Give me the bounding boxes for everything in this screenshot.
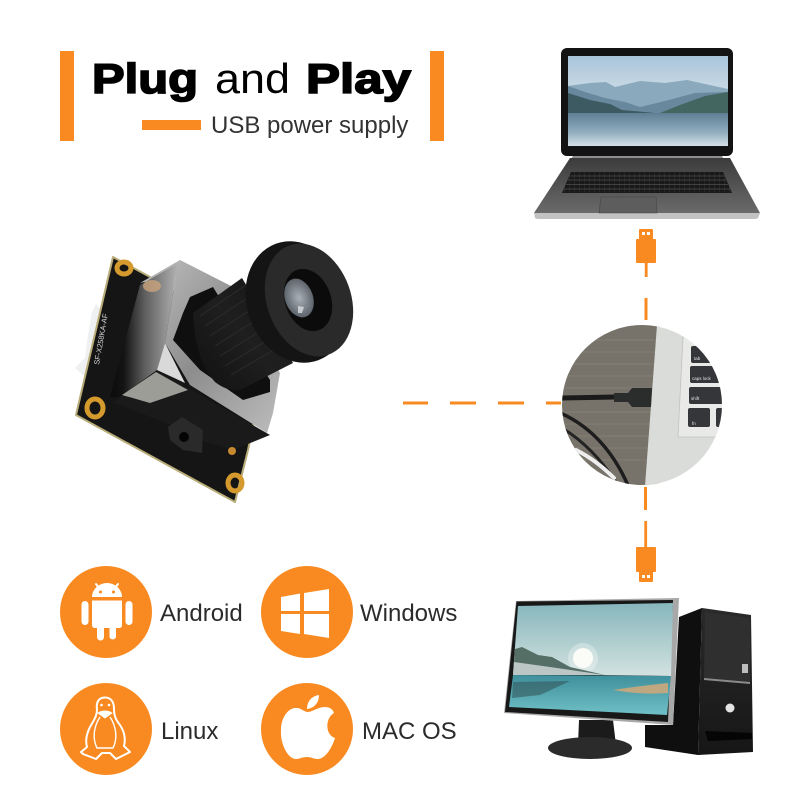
desktop computer: [504, 598, 753, 759]
panel: Linux: [60, 683, 218, 775]
circle: [261, 683, 353, 775]
laptop front lip: [534, 213, 760, 219]
icon: linux penguin: [81, 698, 130, 759]
monitor stand neck: [578, 720, 616, 745]
monitor screen: [509, 603, 673, 715]
right orange bar: [430, 51, 444, 141]
tower power button: [726, 704, 734, 712]
camera module: [75, 227, 368, 502]
laptop touchpad: [599, 197, 657, 213]
metal fold highlight: [157, 343, 185, 383]
laptop screen: [568, 56, 728, 146]
title: Plug: [92, 55, 198, 102]
tower lower slot: [705, 731, 752, 741]
key plate: [678, 337, 724, 437]
white connector behind board: [75, 304, 102, 376]
label: MAC OS: [362, 718, 457, 745]
USB connector: [614, 388, 652, 407]
tower front: [698, 608, 753, 755]
circuit board: [76, 257, 270, 502]
barrel threads: [200, 285, 282, 375]
mounting holes: [87, 262, 242, 491]
metal front highlight: [122, 372, 188, 403]
panel: Android: [60, 566, 243, 658]
dashed connector: vertical upper: [644, 298, 648, 320]
icon: android: [82, 583, 132, 640]
laptop: [534, 48, 760, 219]
label: Windows: [360, 600, 457, 627]
coiled cables: [562, 412, 630, 484]
monitor frame: [504, 598, 679, 725]
key labels: shift: [691, 396, 700, 401]
icon: USB plug bottom: [636, 521, 656, 582]
circle: [60, 683, 152, 775]
key labels: caps lock: [692, 376, 712, 381]
metal housing top edge: [140, 260, 280, 433]
tan highlight: [143, 280, 161, 292]
dark lens mount: [173, 287, 270, 400]
subtitle dash: [142, 120, 201, 130]
tower upper bay: [704, 612, 750, 682]
lens glare: [298, 306, 304, 313]
icon: USB plug top: [636, 229, 656, 277]
model label: SF-X258KA-AF: [92, 312, 110, 365]
title: Play: [306, 55, 412, 102]
panel: Windows: [261, 566, 457, 658]
tabletop: [560, 323, 660, 488]
laptop hinge: [568, 156, 726, 163]
metal housing left face: [110, 262, 180, 397]
tower side: [645, 608, 702, 755]
key labels: [691, 356, 712, 426]
monitor stand base: [548, 737, 632, 759]
label: Android: [160, 600, 243, 627]
USB cable: [560, 397, 615, 398]
lens inner bore: [275, 262, 341, 338]
keyboard keys: [688, 346, 722, 427]
dashed connector: vertical lower: [644, 487, 647, 510]
dashed connector: horizontal: [403, 402, 561, 404]
tower silver strip: [704, 678, 750, 684]
left orange bar: [60, 51, 74, 141]
lens front ring: [250, 231, 368, 369]
lens ring side: [229, 227, 365, 377]
monitor bezel: [505, 600, 673, 722]
label: Linux: [161, 718, 218, 745]
circle: [261, 566, 353, 658]
subtitle: USB power supply: [211, 112, 408, 139]
small gold screw: [228, 447, 236, 455]
laptop keyboard rows: [564, 176, 730, 189]
laptop side: [645, 325, 724, 486]
key labels: tab: [694, 356, 701, 361]
circle: [60, 566, 152, 658]
lens barrel: [193, 278, 293, 390]
panel: MAC OS: [261, 683, 457, 775]
icon: windows: [281, 589, 329, 638]
key labels: fn: [692, 421, 696, 426]
laptop keyboard: [562, 172, 732, 193]
sensor clip: [168, 417, 203, 453]
icon: apple: [281, 695, 335, 759]
laptop deck: [534, 158, 760, 213]
panel: header: [60, 51, 444, 141]
table texture: [562, 339, 597, 461]
laptop lid: [561, 48, 733, 156]
metal front face: [113, 370, 270, 450]
clip hole: [179, 432, 189, 442]
tower USB ports: [742, 664, 748, 673]
title: and: [215, 55, 290, 102]
lens glass: [279, 274, 319, 322]
photo: USB cable plugged into laptop: [558, 323, 726, 490]
